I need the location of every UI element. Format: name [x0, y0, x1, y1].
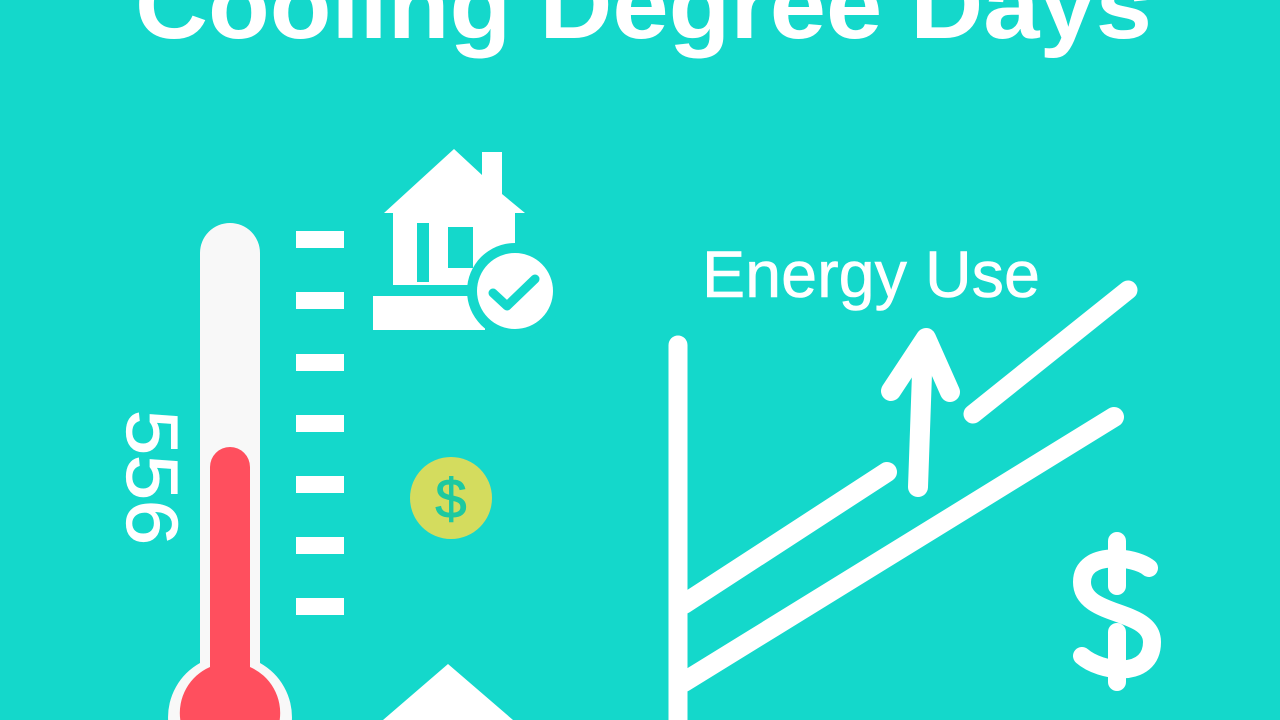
- icon: house roof at bottom: [383, 664, 513, 720]
- icon: dollar coin: [410, 457, 492, 539]
- rotated temperature label: 556: [111, 410, 191, 545]
- icon: house with check badge: [373, 149, 563, 339]
- line chart: energy use: [668, 290, 1128, 720]
- icon: dollar coin: $: [435, 467, 467, 530]
- energy use label: Energy Use: [702, 237, 1040, 311]
- temperature scale ticks: [296, 231, 344, 615]
- icon: large dollar sign: [1082, 541, 1152, 682]
- thermometer: [168, 223, 292, 720]
- arrow: rising energy use: [891, 338, 950, 487]
